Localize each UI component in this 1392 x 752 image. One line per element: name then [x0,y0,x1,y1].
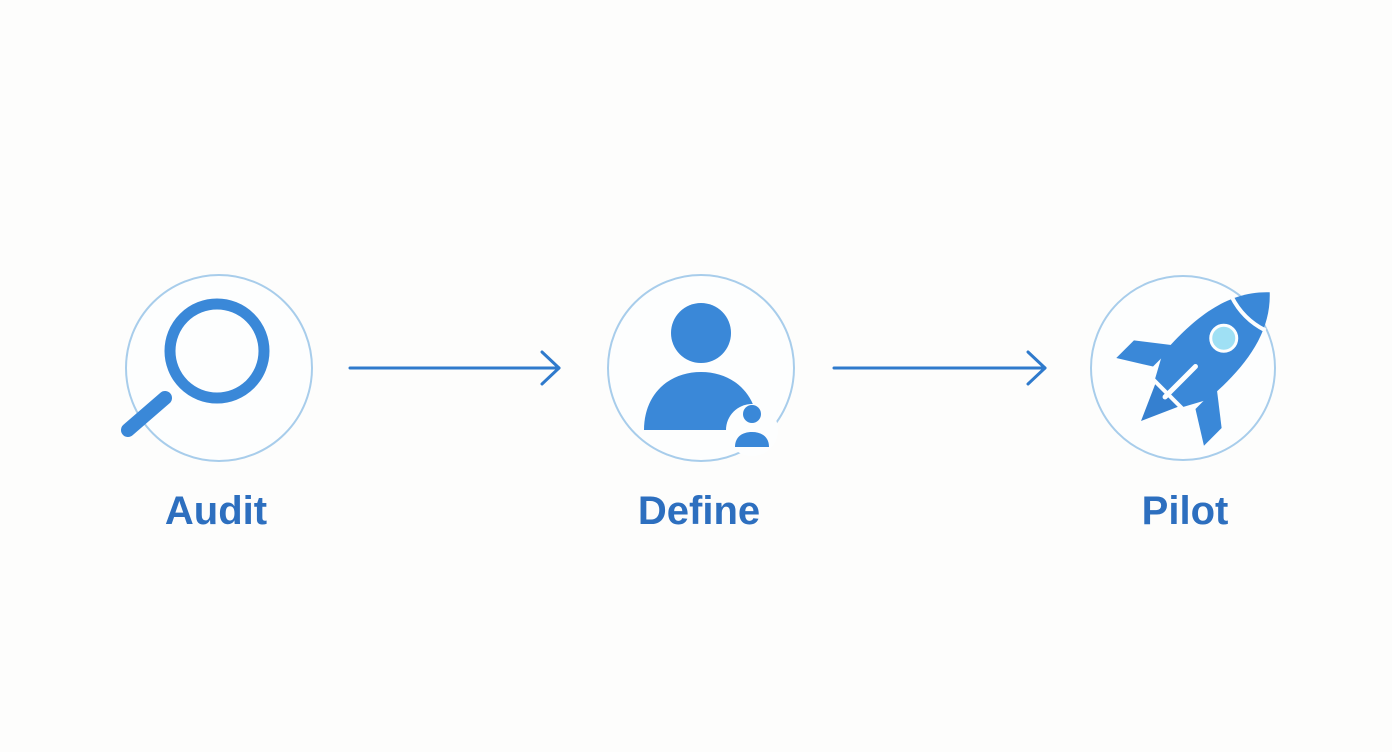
icon: rocket [1097,248,1314,465]
circle: audit [126,275,312,461]
circle: define [608,275,794,461]
step: define [608,275,794,533]
icon: person [644,303,778,456]
label: Define: Define [638,489,760,533]
step: pilot [1091,248,1314,533]
icon: magnifying glass [128,304,264,430]
label: Audit: Audit [165,489,267,533]
circle: pilot [1091,276,1275,460]
arrow 2 [834,352,1045,384]
step: audit [126,275,312,533]
label: Pilot: Pilot [1142,489,1228,533]
arrow 1 [350,352,559,384]
